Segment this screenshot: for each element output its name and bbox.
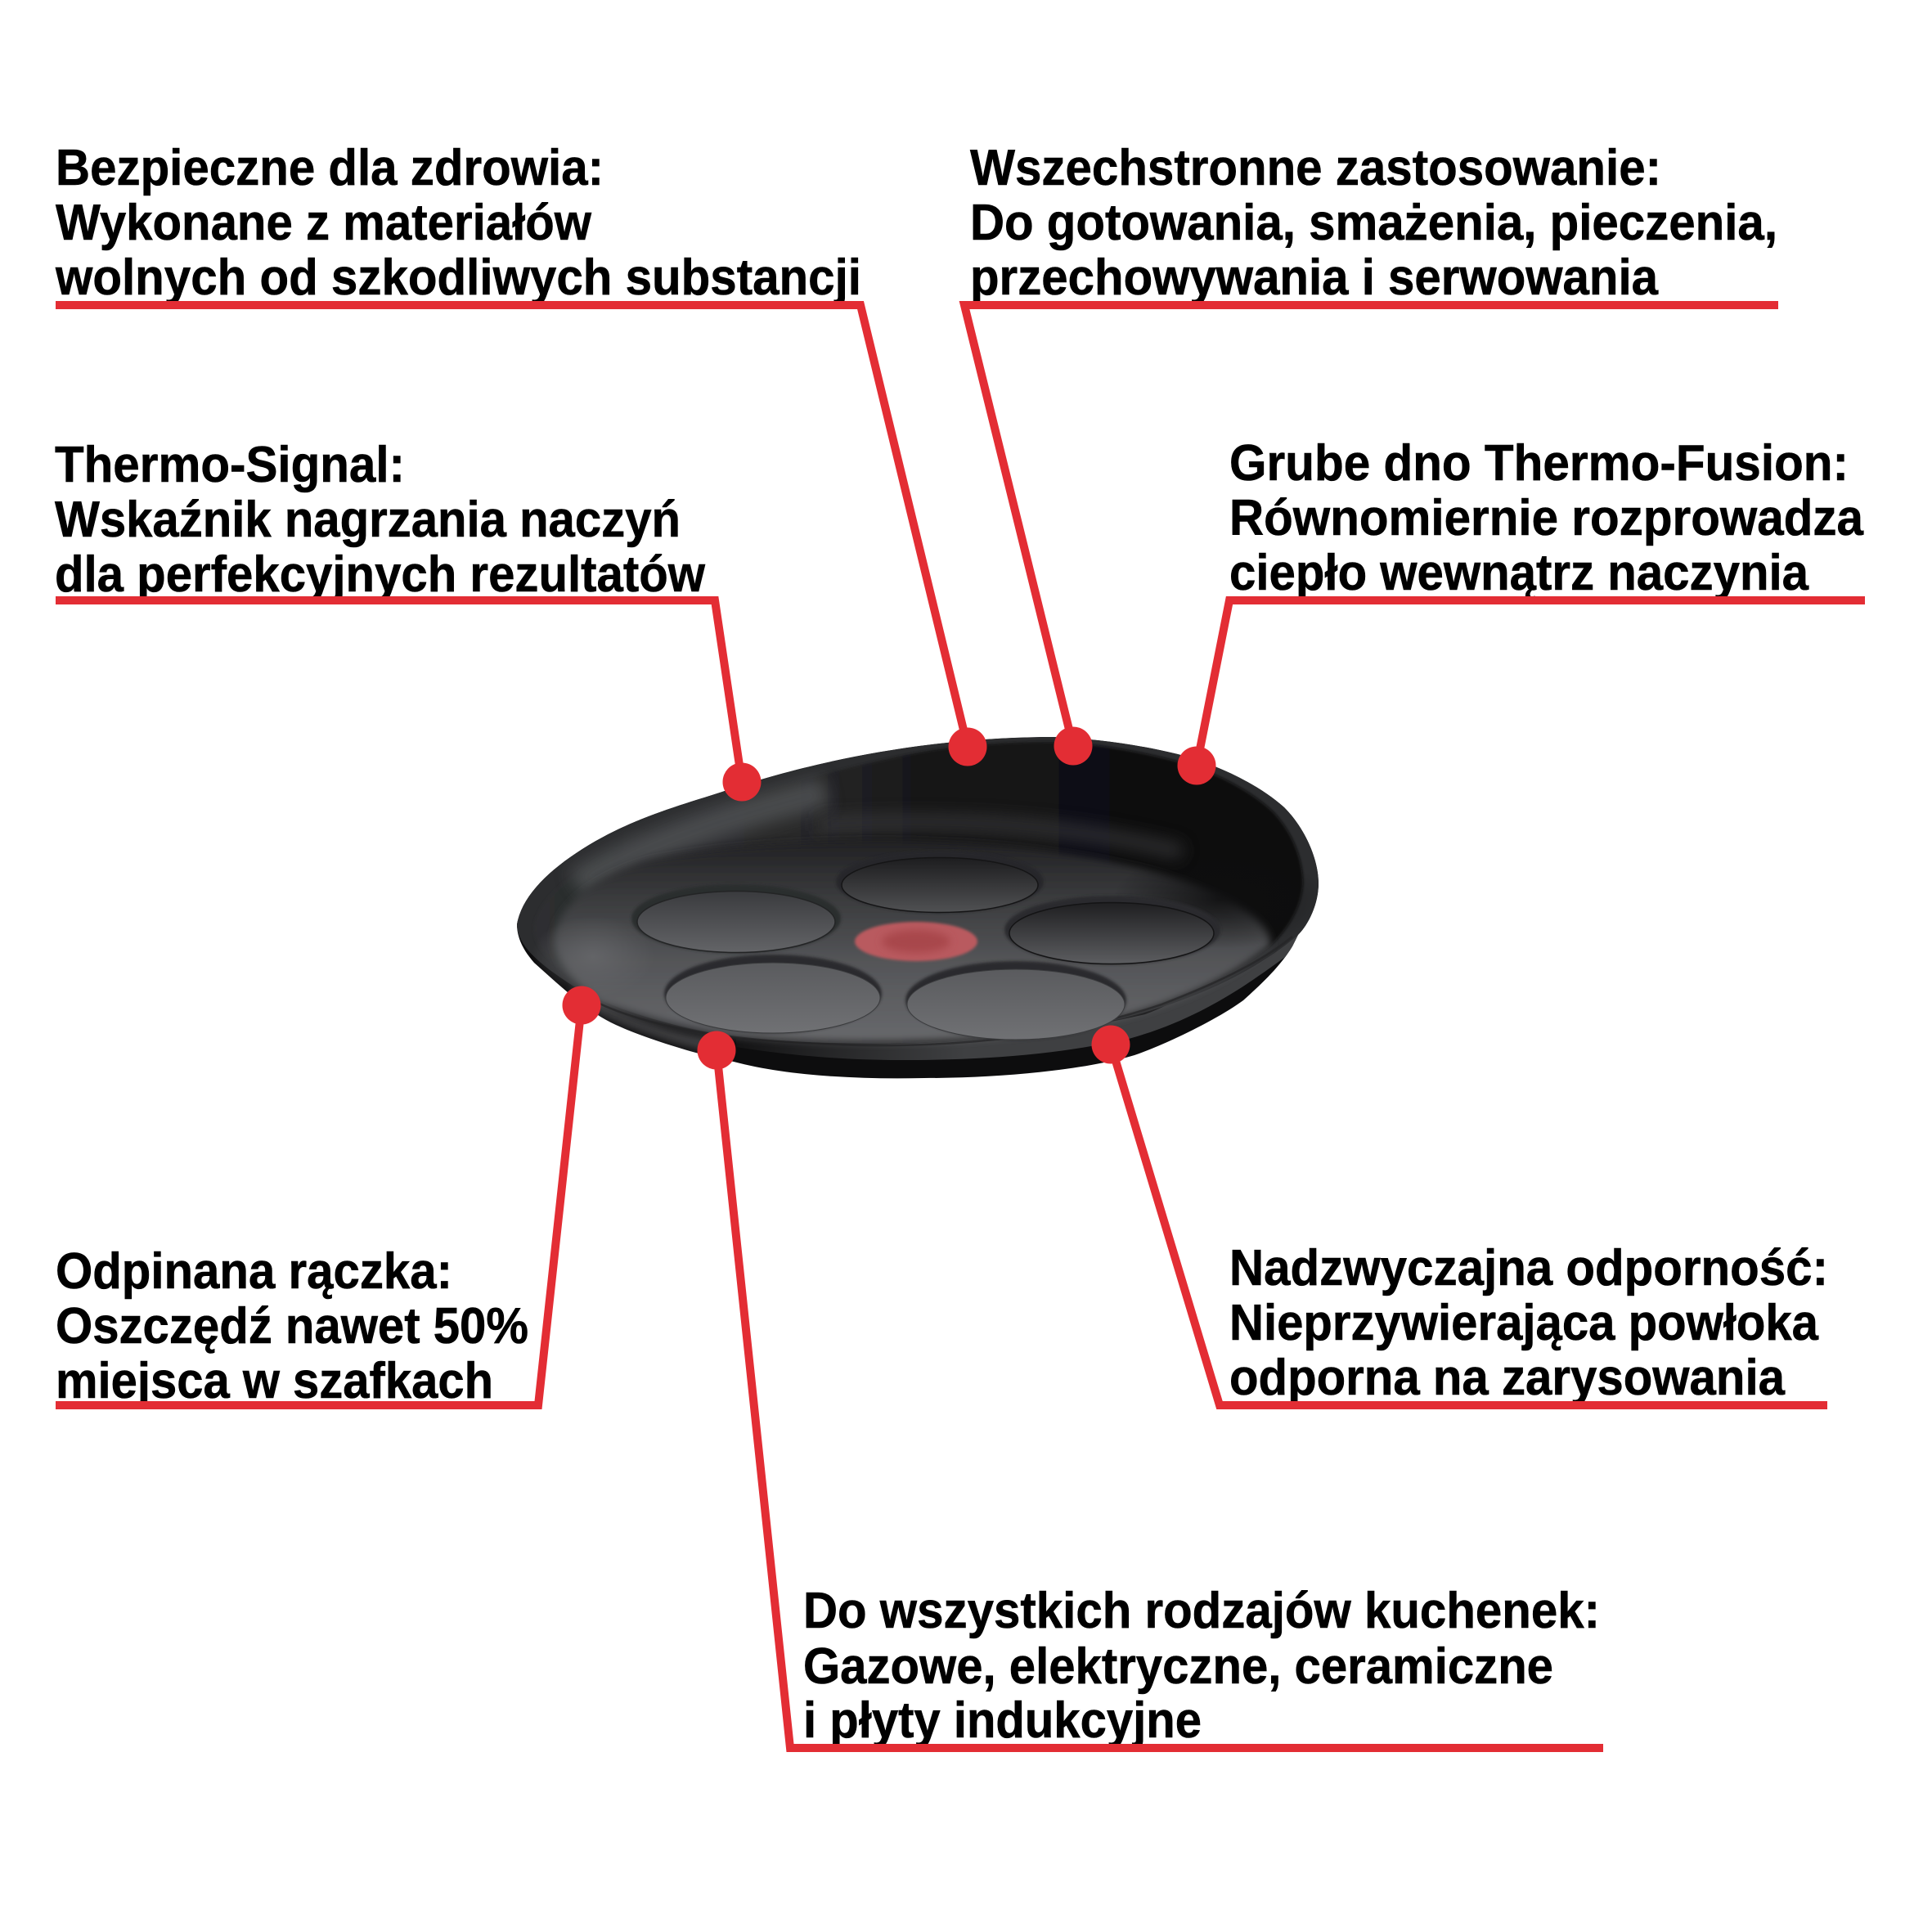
callout: Bezpieczne dla zdrowia — [55, 140, 987, 766]
recess: left — [631, 884, 841, 953]
wall highlight back — [818, 822, 1182, 852]
floor highlight left — [538, 928, 628, 990]
callout: Odpinana rączka: miejsca w szafkach — [56, 1353, 493, 1409]
callout: Grube dno Thermo-Fusion — [1178, 435, 1865, 785]
red thermo-signal spot — [855, 922, 977, 961]
callout: Nadzwyczajna odporność: odporna na zarysowania — [1229, 1350, 1785, 1406]
callout: Thermo-Signal: Wskaźnik nagrzania naczyń — [55, 492, 681, 548]
callout: Wszechstronne zastosowanie: Do gotowania, smażenia, pieczenia, — [970, 195, 1777, 251]
floor edge line — [600, 947, 1278, 1047]
callout: Odpinana rączka: Oszczędź nawet 50% — [56, 1298, 528, 1355]
callout: Wszechstronne zastosowanie: Wszechstronne zastosowanie: — [970, 140, 1661, 196]
recess: right — [1004, 896, 1220, 964]
callout: Thermo-Signal: Thermo-Signal: — [55, 437, 405, 493]
callout: Wszechstronne zastosowanie — [964, 140, 1778, 766]
floor shadow right — [1136, 878, 1265, 941]
callout: Wszechstronne zastosowanie: przechowywania i serwowania — [970, 249, 1658, 306]
callout: Do wszystkich rodzajów kuchenek: i płyty indukcyjne — [803, 1692, 1202, 1749]
callout: Bezpieczne dla zdrowia: Wykonane z materiałów — [56, 195, 592, 251]
rim band lower — [736, 928, 1301, 1060]
callout: Do wszystkich rodzajów kuchenek — [697, 1031, 1603, 1749]
callout: Do wszystkich rodzajów kuchenek: Do wszystkich rodzajów kuchenek: — [803, 1583, 1600, 1639]
callout: Bezpieczne dla zdrowia: Bezpieczne dla zdrowia: — [56, 140, 604, 196]
upper rim — [517, 737, 1319, 1044]
callout: Thermo-Signal: dla perfekcyjnych rezultatów — [55, 546, 706, 603]
recess: bottom right — [905, 961, 1126, 1040]
lower body band left — [573, 986, 720, 1051]
callout: Odpinana rączka — [56, 986, 600, 1409]
recess: bottom left — [664, 955, 882, 1033]
recess: top — [836, 851, 1044, 913]
callout: Bezpieczne dla zdrowia: wolnych od szkodliwych substancji — [55, 249, 861, 306]
callout: Grube dno Thermo-Fusion: ciepło wewnątrz naczynia — [1229, 545, 1808, 601]
callout: Nadzwyczajna odporność: Nadzwyczajna odporność: — [1229, 1240, 1828, 1296]
callout: Grube dno Thermo-Fusion: Grube dno Thermo-Fusion: — [1229, 435, 1849, 492]
callout: Nadzwyczajna odporność: Nieprzywierająca powłoka — [1229, 1295, 1818, 1351]
callout: Odpinana rączka: Odpinana rączka: — [56, 1243, 452, 1300]
callout: Nadzwyczajna odporność — [1091, 1026, 1828, 1406]
callout: Grube dno Thermo-Fusion: Równomiernie rozprowadza — [1229, 490, 1863, 546]
pan floor — [554, 840, 1270, 1042]
wall highlight left — [577, 792, 826, 885]
pan outer body — [517, 737, 1319, 1078]
inner wall — [813, 741, 1304, 1041]
callout: Do wszystkich rodzajów kuchenek: Gazowe, elektryczne, ceramiczne — [803, 1638, 1553, 1695]
callout: Thermo-Signal — [55, 437, 761, 802]
image: black pancake pan — [517, 737, 1325, 1078]
